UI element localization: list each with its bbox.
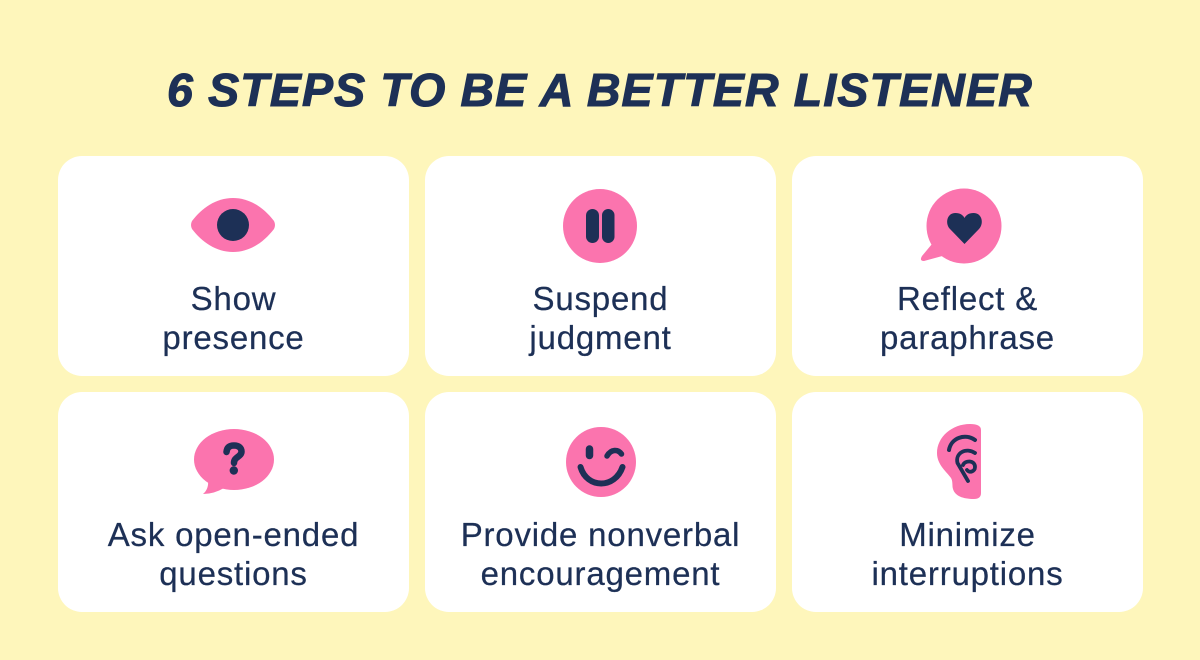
icon: question speech bubble <box>194 429 274 494</box>
label: reflect and paraphrase <box>880 280 1055 356</box>
icon: pause <box>563 189 637 263</box>
panel: ask open-ended questions <box>58 392 409 612</box>
label: ask open-ended questions <box>108 516 359 592</box>
label: provide nonverbal encouragement <box>461 516 740 592</box>
icon: ear <box>937 424 981 499</box>
panel: provide nonverbal encouragement <box>425 392 776 612</box>
icon: eye <box>191 198 275 252</box>
label: suspend judgment: judgment <box>529 319 672 356</box>
icon: winking face <box>566 427 636 497</box>
label: ask open-ended questions: Ask open-ended <box>108 516 359 553</box>
panel: reflect and paraphrase <box>792 156 1143 376</box>
panel: minimize interruptions <box>792 392 1143 612</box>
icon: heart speech bubble <box>920 188 1002 264</box>
panel: show presence <box>58 156 409 376</box>
label: minimize interruptions: interruptions <box>872 555 1064 592</box>
title: 6 STEPS TO BE A BETTER LISTENER <box>167 64 1033 116</box>
panel: suspend judgment <box>425 156 776 376</box>
label: show presence: Show <box>191 280 276 317</box>
label: provide nonverbal encouragement: encouragement <box>481 555 720 592</box>
label: reflect and paraphrase: paraphrase <box>880 319 1055 356</box>
label: minimize interruptions <box>872 516 1064 592</box>
label: suspend judgment <box>528 280 672 356</box>
label: show presence: presence <box>162 319 305 356</box>
label: reflect and paraphrase: Reflect & <box>897 280 1038 317</box>
label: suspend judgment: Suspend <box>533 280 668 317</box>
label: show presence <box>162 280 305 356</box>
label: ask open-ended questions: questions <box>159 555 308 592</box>
label: provide nonverbal encouragement: Provide nonverbal <box>461 516 740 553</box>
label: minimize interruptions: Minimize <box>899 516 1036 553</box>
